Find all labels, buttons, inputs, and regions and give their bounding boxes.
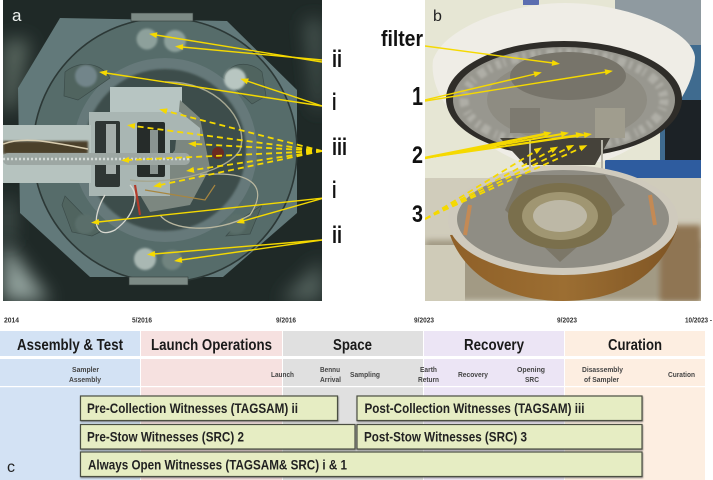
phase headings: Curation [608, 337, 662, 354]
phase columns [0, 331, 705, 480]
labels for panel a [332, 46, 347, 249]
bar: post-stow witnesses: Post-Stow Witnesses (SRC) 3 [364, 430, 527, 444]
sub-phase labels: Recovery [458, 370, 489, 379]
bar: post-stow witnesses [357, 424, 642, 449]
sub-phase labels: Sampler [72, 365, 99, 374]
bar: post-collection witnesses: Post-Collection Witnesses (TAGSAM) iii [364, 401, 584, 416]
phase headings [17, 337, 662, 354]
bar: pre-collection witnesses [80, 396, 338, 420]
phase headings: Launch Operations [151, 337, 272, 354]
sub-phase labels [69, 365, 695, 384]
date axis [4, 318, 713, 324]
labels for panel b [381, 26, 423, 228]
dashed arrows 3 [425, 148, 581, 219]
date axis: 9/2016 [276, 318, 296, 324]
labels for panel a: iii [332, 134, 347, 161]
sub-phase labels: Earth [420, 365, 437, 374]
panel a: sampler head photograph [3, 0, 324, 301]
background equipment [425, 0, 701, 301]
sub-phase labels: Arrival [320, 375, 341, 384]
date axis: 5/2016 [132, 318, 152, 324]
arrows to discs i and ii (bottom) [98, 198, 324, 260]
bar: pre-stow witnesses [80, 424, 355, 449]
bar: always open witnesses [80, 452, 642, 476]
capsule lid [433, 3, 695, 170]
labels for panel b: 1 [412, 81, 423, 111]
labels for panel a: ii [332, 222, 342, 249]
labels for panel a: i [332, 177, 336, 204]
panel b: sample return capsule photograph [425, 0, 701, 301]
labels for panel b: filter [381, 26, 423, 51]
sub-phase labels: Sampling [350, 370, 380, 379]
labels for panel a: ii [332, 46, 342, 73]
phase headings: Assembly & Test [17, 337, 123, 354]
dashed arrows iii [128, 111, 322, 185]
labels for panel b: 2 [412, 142, 423, 169]
sub-phase labels: SRC [525, 375, 539, 384]
panel c: timeline [0, 318, 713, 480]
sampler mechanism [3, 82, 258, 233]
date axis: 9/2023 [414, 318, 434, 324]
letter c: c [7, 459, 15, 476]
sub-phase labels: Launch [271, 370, 294, 379]
sub-phase labels: Disassembly [582, 365, 624, 374]
arrows 2 [425, 134, 585, 158]
bar: pre-stow witnesses: Pre-Stow Witnesses (SRC) 2 [87, 430, 244, 444]
phase headings: Space [333, 337, 372, 354]
phase headings: Recovery [464, 337, 524, 354]
date axis: 2014 [4, 318, 19, 324]
labels for panel a: i [332, 89, 336, 116]
bar: post-collection witnesses [357, 396, 642, 420]
arrows filter, 1 [425, 46, 606, 101]
labels for panel b: 3 [412, 201, 423, 228]
bar: pre-collection witnesses: Pre-Collection Witnesses (TAGSAM) ii [87, 401, 298, 416]
sub-phase labels: Bennu [320, 365, 340, 374]
capsule base [448, 165, 678, 301]
hinges [129, 13, 193, 285]
date axis: 9/2023 [557, 318, 577, 324]
sub-phase labels: Assembly [69, 375, 102, 384]
letter a: a [12, 6, 22, 25]
witness discs [75, 28, 246, 270]
arrows to discs ii and i (top) [106, 35, 322, 106]
bar: always open witnesses: Always Open Witnesses (TAGSAM& SRC) i & 1 [88, 458, 347, 472]
sub-phase labels: of Sampler [584, 375, 619, 384]
sub-phase labels: Curation [668, 370, 695, 379]
sub-phase labels: Return [418, 375, 439, 384]
letter b: b [433, 8, 442, 25]
sub-phase labels: Opening [517, 365, 545, 374]
